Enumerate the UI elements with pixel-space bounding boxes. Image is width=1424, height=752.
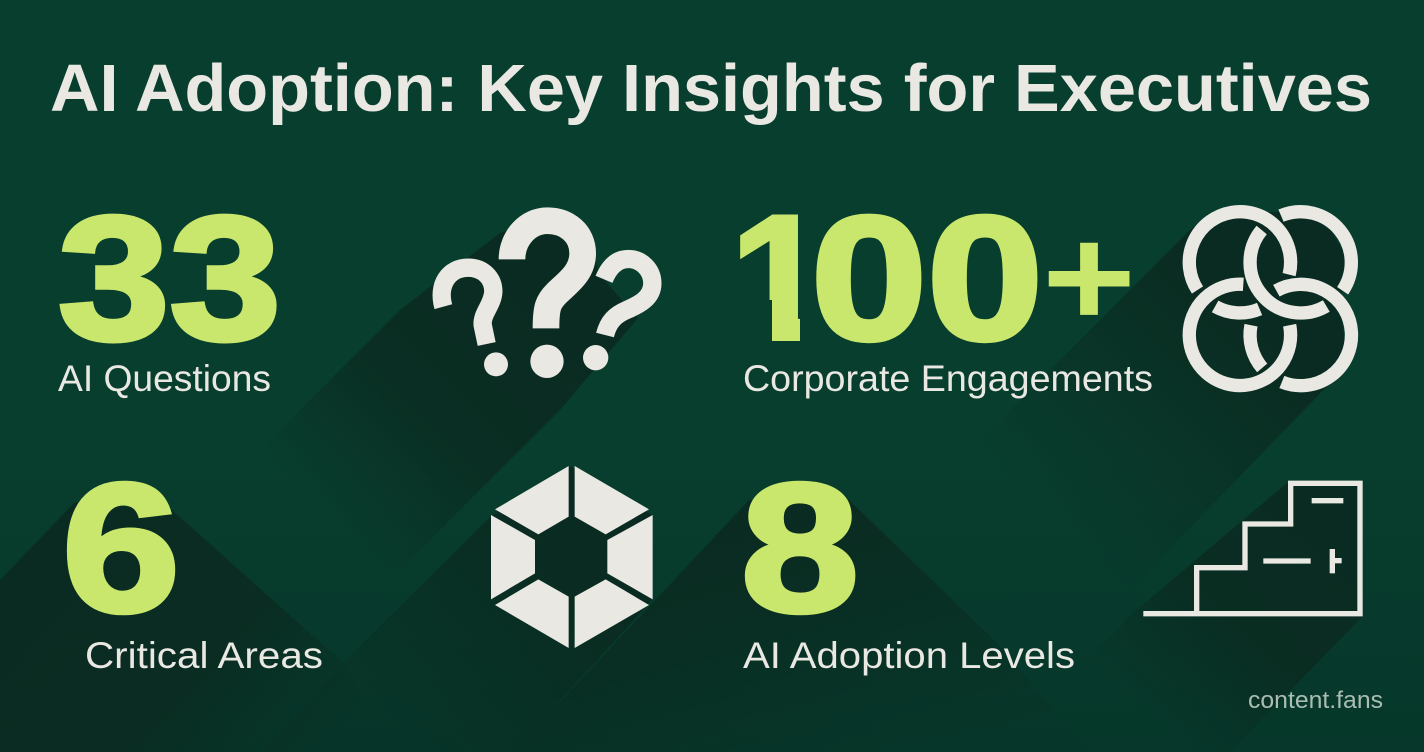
long shadow: number 6 bbox=[0, 502, 400, 752]
number 100+: 00 bbox=[811, 181, 1043, 377]
long shadow: stairs bbox=[1000, 483, 1362, 752]
number 33: 33 bbox=[58, 181, 281, 377]
stat: 100+ Corporate Engagements bbox=[740, 214, 1152, 398]
stat: 8 AI Adoption Levels bbox=[741, 445, 1075, 676]
label: AI Questions: AI Questions bbox=[58, 358, 271, 399]
number 100+ bbox=[740, 214, 1130, 344]
icon: stairs bbox=[1143, 483, 1360, 614]
number 8: 8 bbox=[741, 445, 859, 650]
stat: 6 Critical Areas bbox=[62, 445, 323, 676]
icon: segmented hexagon bbox=[491, 466, 653, 648]
long shadow: number 8 bbox=[513, 500, 1090, 752]
label: AI Adoption Levels: AI Adoption Levels bbox=[743, 635, 1075, 676]
stat: 33 AI Questions bbox=[58, 181, 281, 399]
number 6: 6 bbox=[62, 445, 180, 650]
icon: question marks bbox=[442, 221, 652, 378]
icon: interlocking rings bbox=[1189, 212, 1351, 386]
long shadow: hexagon bbox=[260, 466, 652, 752]
number 100+: + bbox=[1042, 198, 1136, 357]
long shadow: question marks bbox=[240, 220, 638, 570]
label: Corporate Engagements: Corporate Engagements bbox=[743, 358, 1153, 399]
watermark: content.fans bbox=[1248, 687, 1383, 714]
long shadow: rings bbox=[960, 212, 1350, 590]
title: AI Adoption: Key Insights for Executives bbox=[50, 51, 1372, 126]
number 100+: 1 bbox=[730, 178, 829, 377]
label: Critical Areas: Critical Areas bbox=[85, 635, 323, 676]
